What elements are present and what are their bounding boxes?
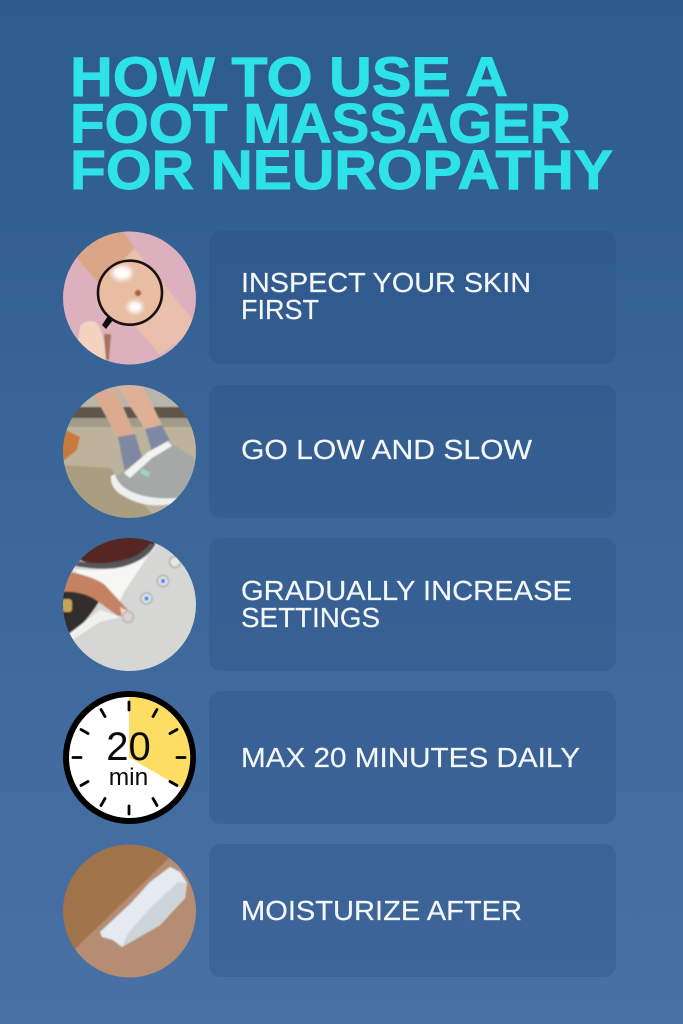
icon: 20 minute timer: 20 [106,725,151,769]
step 1: inspect your skin [63,232,529,364]
panel: moisturize after [209,844,616,977]
step 5: moisturize after [60,842,616,985]
panel: go low and slow: GO LOW AND SLOW [241,434,532,465]
panel: inspect your skin: FIRST [241,294,319,325]
panel: inspect your skin [209,231,616,364]
icon: magnifying glass over skin [63,232,196,364]
icon: feet in massager slipper [60,382,200,522]
step 4: max 20 minutes daily [63,691,616,824]
panel: moisturize after: MOISTURIZE AFTER [241,895,522,926]
panel: go low and slow [209,385,616,518]
icon: moisturizer on arm [63,844,196,978]
title: FOOT MASSAGER [70,92,571,155]
title [70,45,613,201]
panel: gradually increase settings: GRADUALLY INCREASE [241,575,572,606]
step 3: gradually increase settings [60,530,616,675]
icon: finger pressing massager buttons [63,538,196,671]
panel: inspect your skin: INSPECT YOUR SKIN [241,267,531,298]
icon: 20 minute timer [63,691,196,824]
icon: 20 minute timer: min [109,764,148,791]
title: FOR NEUROPATHY [70,138,613,201]
panel: gradually increase settings [209,538,616,671]
step 2: go low and slow [60,382,616,522]
panel: gradually increase settings: SETTINGS [241,602,380,633]
panel: max 20 minutes daily: MAX 20 MINUTES DAILY [241,742,580,773]
panel: max 20 minutes daily [209,691,616,824]
title: HOW TO USE A [70,45,508,108]
